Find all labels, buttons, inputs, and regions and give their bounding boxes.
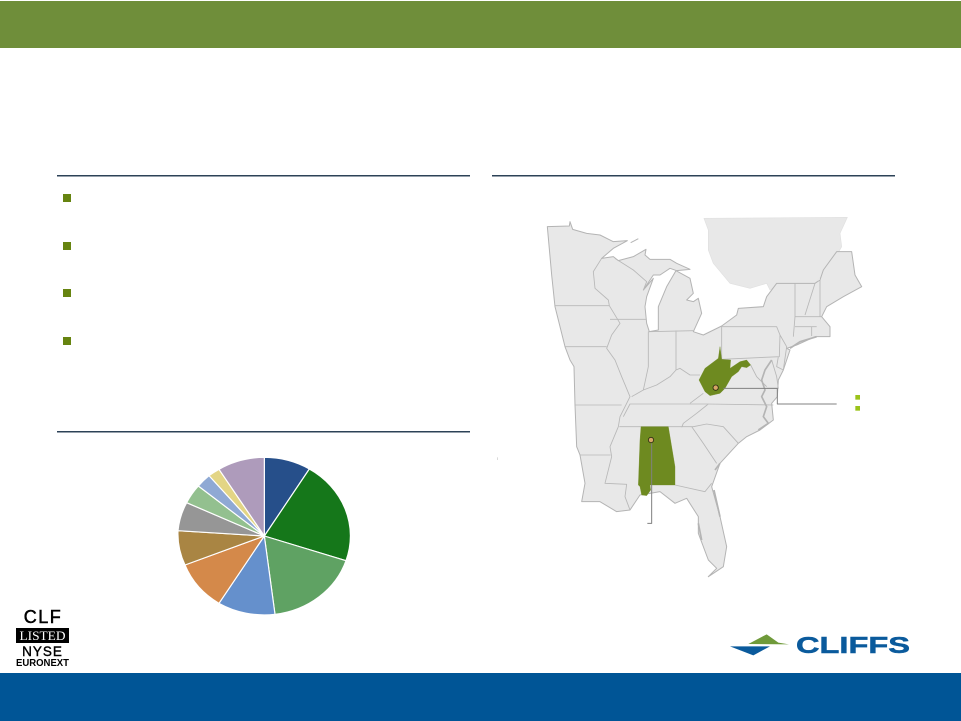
location marker: West Virginia <box>713 385 718 390</box>
map: state borders <box>555 258 822 510</box>
NYSE listed badge: NYSE <box>22 644 63 659</box>
NYSE listed badge: CLF <box>24 607 62 627</box>
small speck <box>496 457 499 460</box>
callout lines <box>647 388 837 523</box>
map: West Virginia highlighted <box>699 347 751 396</box>
Cliffs logo <box>730 632 910 658</box>
pie chart <box>178 457 350 615</box>
map: Chesapeake and sounds coastline <box>698 337 817 540</box>
location marker: Alabama <box>648 437 654 443</box>
map: Alabama highlighted <box>638 427 675 496</box>
section rules <box>57 175 895 432</box>
map of eastern United States <box>497 217 862 577</box>
footer banner <box>0 673 961 721</box>
bullet list markers <box>63 194 71 345</box>
logo mark <box>730 634 789 655</box>
logo wordmark: CLIFFS <box>796 632 910 658</box>
callout bullet markers <box>855 395 860 411</box>
map: Ontario landmass <box>704 217 847 290</box>
NYSE listed badge <box>16 607 69 669</box>
NYSE listed badge: EURONEXT <box>16 658 69 669</box>
map: Isle Royale <box>631 239 638 243</box>
header banner <box>0 1 961 48</box>
map: US landmass <box>547 222 862 577</box>
NYSE listed badge: LISTED <box>20 629 66 643</box>
